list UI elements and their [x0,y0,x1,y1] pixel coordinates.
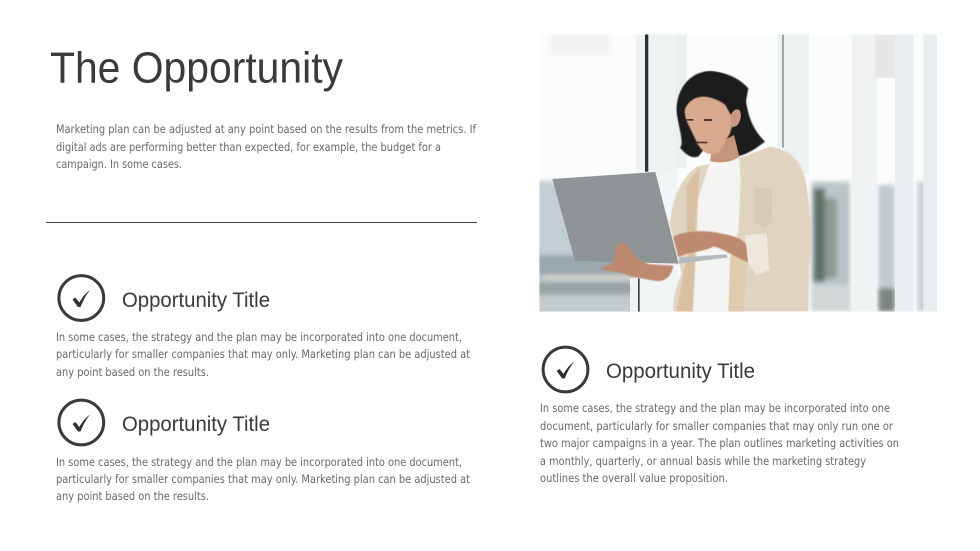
body text 2 [56,455,470,503]
intro text: digital ads are performing better than expected, for example, the budget for a [56,140,441,154]
body text 3: a monthly, quarterly, or annual basis while the marketing strategy [540,454,866,468]
icon: check circle 2 [59,400,104,445]
body text 3: In some cases, the strategy and the plan may be incorporated into one [540,401,890,415]
holding hand [601,243,673,281]
item 2: opportunity [56,400,470,503]
body text 2: particularly for smaller companies that may only. Marketing plan can be adjusted at [56,472,470,486]
neck [710,135,739,162]
heading 3: Opportunity Title [606,359,755,383]
icon: check circle 1 [59,276,104,320]
icon: check circle 3 [543,347,588,392]
t-shirt [693,157,741,312]
body text 3: document, particularly for smaller companies that may only run one or [540,419,893,433]
sleeve [745,233,769,275]
body text 3: outlines the overall value proposition. [540,471,728,485]
heading 2: Opportunity Title [122,412,270,436]
intro text [56,122,477,171]
body text 1: any point based on the results. [56,365,209,379]
item 1: opportunity [56,276,470,379]
divider line [46,222,477,223]
body text 1: particularly for smaller companies that may only. Marketing plan can be adjusted at [56,347,470,361]
title: The Opportunity [50,44,343,92]
window view left [537,34,637,315]
photo: man with laptop by window [537,34,937,315]
shirt pocket [754,188,773,228]
body text 2: any point based on the results. [56,489,209,503]
intro text: Marketing plan can be adjusted at any point based on the results from the metrics. If [56,122,477,136]
shirt outer [670,147,811,312]
body text 3 [540,401,899,485]
body text 1 [56,330,470,379]
heading 1: Opportunity Title [122,288,270,312]
hair fringe [677,72,748,132]
intro text: campaign. In some cases. [56,157,182,171]
person [552,71,811,312]
hair back [677,71,765,157]
typing hand and forearm [673,231,748,262]
window view right [812,182,927,312]
window columns [630,34,937,312]
ear [731,109,741,127]
face [684,96,734,154]
eyes and mouth [687,119,712,143]
photo background [539,34,937,312]
laptop [552,172,679,264]
item 3: opportunity [540,347,899,485]
body text 3: two major campaigns in a year. The plan outlines marketing activities on [540,436,899,450]
body text 1: In some cases, the strategy and the plan may be incorporated into one document, [56,330,462,344]
body text 2: In some cases, the strategy and the plan may be incorporated into one document, [56,455,462,469]
shirt shadow fold [677,167,700,312]
